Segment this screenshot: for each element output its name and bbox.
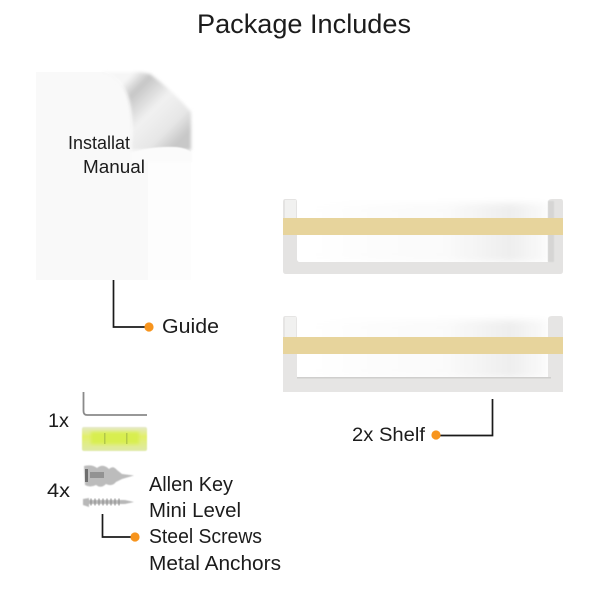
shelf 2 frame bbox=[283, 316, 563, 392]
shelf 2 inner edge bbox=[297, 377, 551, 378]
manual title, first line: Installat bbox=[68, 133, 130, 153]
page curl bbox=[100, 72, 191, 150]
icon: metal anchor bbox=[84, 465, 134, 487]
guide connector bbox=[114, 280, 154, 332]
hardware list: Mini Level bbox=[149, 500, 241, 522]
page curl underside cover bbox=[131, 147, 192, 162]
manual title, second line: Manual bbox=[83, 157, 145, 177]
shelf 1 right upright shading bbox=[548, 201, 554, 262]
shelf 1 back shadow bbox=[297, 203, 548, 262]
shelf 2 left upright highlight bbox=[285, 317, 296, 337]
title: Package Includes bbox=[197, 9, 411, 39]
icon: mini level bbox=[82, 427, 147, 451]
shelf label: 2x Shelf bbox=[352, 425, 426, 446]
icon: steel screw bbox=[83, 498, 134, 507]
guide label: Guide bbox=[162, 316, 219, 338]
shelf connector bbox=[431, 399, 492, 440]
shelf 2 bbox=[283, 316, 563, 392]
shelf 1 left upright highlight bbox=[285, 200, 296, 218]
quantity 1x: 1x bbox=[48, 411, 70, 432]
shelf 1 bbox=[283, 199, 563, 274]
hardware list: Metal Anchors bbox=[149, 553, 281, 575]
shelf 1 brass rail bbox=[283, 218, 563, 235]
hardware list: Allen Key bbox=[149, 474, 233, 496]
quantity 4x: 4x bbox=[47, 481, 71, 502]
shelf 2 back shadow bbox=[297, 320, 548, 378]
hardware list: Steel Screws bbox=[149, 526, 262, 548]
shelf 2 brass rail bbox=[283, 337, 563, 354]
hardware list bbox=[149, 474, 281, 575]
manual lower page highlight bbox=[148, 152, 191, 280]
manual page bbox=[36, 72, 191, 280]
icon: allen key bbox=[84, 392, 147, 415]
hardware connector bbox=[102, 514, 140, 542]
shelf 1 frame bbox=[283, 199, 563, 274]
panel: installation manual bbox=[36, 72, 192, 280]
level vials bbox=[91, 432, 139, 444]
